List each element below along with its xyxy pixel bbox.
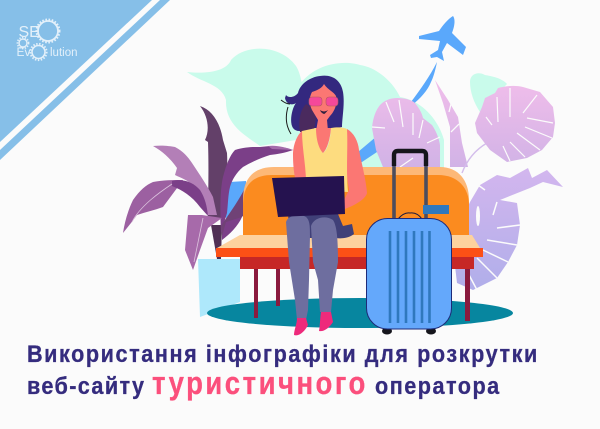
logo: SEO Evolution: lution bbox=[50, 47, 78, 59]
laptop bbox=[272, 176, 345, 217]
lower right leaf bbox=[221, 190, 244, 236]
purple plant bbox=[123, 106, 293, 270]
hair strand bbox=[281, 100, 291, 134]
title: туристичного bbox=[152, 366, 365, 402]
logo: SEO Evolution: SE bbox=[18, 24, 40, 41]
carry handle bbox=[398, 213, 422, 219]
far left leaf bbox=[123, 180, 183, 233]
title: Використання інфографіки для розкрутки bbox=[27, 340, 537, 367]
teal floor shadow bbox=[207, 298, 513, 328]
title: оператора bbox=[375, 372, 499, 399]
bench back bbox=[243, 175, 469, 240]
logo: SEO Evolution bbox=[16, 20, 78, 60]
airplane with contrail bbox=[346, 16, 466, 170]
title bbox=[27, 340, 537, 402]
sunglasses bbox=[309, 97, 338, 106]
mint background blobs bbox=[187, 49, 507, 168]
blue behind plant bbox=[213, 181, 246, 218]
bench lower strip bbox=[240, 257, 474, 269]
left light leaf bbox=[153, 146, 217, 215]
top bbox=[302, 127, 348, 192]
right long leaf bbox=[220, 146, 293, 233]
leaf hole bbox=[476, 206, 480, 226]
face and neck bbox=[310, 84, 337, 131]
luggage tag bbox=[423, 205, 449, 214]
ribs bbox=[390, 231, 430, 323]
bench back rim bbox=[243, 167, 469, 220]
hair shade bbox=[299, 104, 316, 132]
shoes bbox=[294, 312, 333, 335]
suitcase handle bbox=[394, 151, 426, 218]
skirt bbox=[288, 214, 354, 238]
arms bbox=[293, 129, 367, 209]
bench bbox=[216, 167, 483, 321]
tall pink leaf bbox=[435, 80, 468, 167]
suitcase body bbox=[366, 218, 452, 329]
front left leaf bbox=[185, 215, 222, 270]
title: веб-сайту bbox=[27, 372, 144, 399]
plant pot bbox=[198, 259, 240, 317]
suitcase bbox=[366, 151, 452, 334]
wheels bbox=[382, 328, 392, 334]
monstera leaf lower right bbox=[452, 168, 563, 290]
woman bbox=[272, 76, 367, 335]
monstera leaf left bbox=[372, 98, 440, 172]
monstera leaf right bbox=[462, 86, 555, 173]
mouth bbox=[320, 110, 328, 114]
right leg bbox=[311, 217, 338, 312]
left leg bbox=[286, 215, 310, 320]
stems bbox=[211, 225, 222, 259]
bench legs bbox=[254, 269, 470, 321]
bench front strip bbox=[216, 248, 483, 257]
bench seat bbox=[217, 235, 480, 248]
neck v bbox=[316, 128, 331, 153]
logo: SEO Evolution: Ev bbox=[16, 45, 31, 59]
hair bbox=[285, 76, 344, 131]
corner banner bbox=[0, 0, 170, 160]
tall dark leaf bbox=[200, 106, 227, 218]
